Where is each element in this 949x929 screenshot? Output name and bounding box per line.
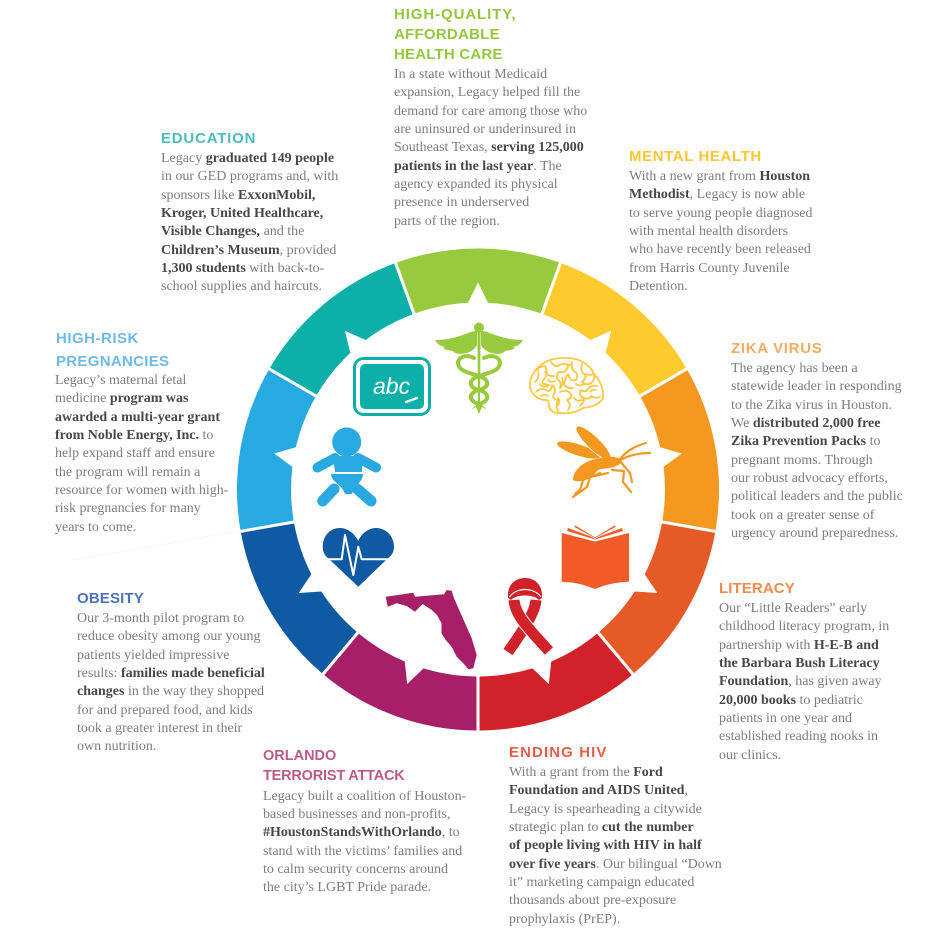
heading: ZIKA VIRUS (731, 340, 822, 357)
text block: of people living with HIV in half (509, 838, 702, 853)
heading: EDUCATION (161, 130, 256, 147)
text block: Legacy’s maternal fetal (55, 373, 186, 388)
heading: LITERACY (719, 580, 795, 597)
icon: chalkboard abc: abc (373, 373, 411, 399)
text block: With a new grant from Houston (629, 169, 810, 184)
icon: baby (318, 428, 376, 501)
text block: Visible Changes, and the (161, 224, 304, 239)
heading: ORLANDO (263, 748, 336, 764)
text block: to the Zika virus in Houston. (731, 398, 892, 413)
text block: #HoustonStandsWithOrlando, to (263, 825, 460, 840)
text block: Methodist, Legacy is now able (629, 187, 805, 202)
heading: MENTAL HEALTH (629, 148, 762, 165)
heading (394, 6, 517, 63)
text block: The agency has been a (731, 361, 858, 376)
panel: education (161, 130, 338, 294)
icon: chalkboard abc (354, 358, 430, 414)
text block: Our 3-month pilot program to (77, 611, 244, 626)
heading: OBESITY (77, 590, 144, 607)
heading: AFFORDABLE (394, 26, 500, 43)
text block: In a state without Medicaid (394, 67, 547, 82)
text block: With a grant from the Ford (509, 765, 663, 780)
text block: to calm security concerns around (263, 862, 448, 877)
icon: heart with pulse (323, 528, 394, 587)
text block: Kroger, United Healthcare, (161, 206, 323, 221)
text block: stand with the victims’ families and (263, 844, 462, 859)
text block: pregnant moms. Through (731, 453, 873, 468)
icon: open book (562, 525, 629, 589)
icon: Florida (386, 590, 477, 669)
text block: parts of the region. (394, 214, 500, 229)
heading (56, 330, 169, 370)
text block: medicine program was (55, 391, 188, 406)
text block: 1,300 students with back-to- (161, 261, 324, 276)
text block: thousands about pre-exposure (509, 893, 676, 908)
heading: PREGNANCIES (56, 352, 169, 370)
text block: took on a greater sense of (731, 508, 874, 523)
text block: Zika Prevention Packs to (731, 434, 880, 449)
icon: mosquito (555, 422, 650, 497)
text block: patients yielded impressive (77, 648, 229, 663)
text block: our clinics. (719, 748, 781, 763)
text block: the Barbara Bush Literacy (719, 656, 880, 671)
text block: risk pregnancies for many (55, 501, 201, 516)
heading: ENDING HIV (509, 744, 608, 761)
text block: patients in one year and (719, 711, 852, 726)
heading: HEALTH CARE (394, 46, 503, 63)
text block: our robust advocacy efforts, (731, 471, 888, 486)
icon: awareness ribbon (508, 578, 549, 652)
text block: 20,000 books to pediatric (719, 693, 863, 708)
heading (263, 748, 405, 784)
text block: prophylaxis (PrEP). (509, 912, 620, 927)
heading: HIGH-QUALITY, (394, 6, 517, 23)
text block: the program will remain a (55, 465, 200, 480)
text block: results: families made beneficial (77, 666, 265, 681)
text block: for and prepared food, and kids (77, 703, 253, 718)
text block: Children’s Museum, provided (161, 243, 336, 258)
panel: literacy (719, 580, 889, 763)
text block: help expand staff and ensure (55, 446, 215, 461)
text block: We distributed 2,000 free (731, 416, 880, 431)
text block: demand for care among those who (394, 104, 587, 119)
text block: Our “Little Readers” early (719, 601, 867, 616)
text block (509, 765, 722, 927)
text block: years to come. (55, 520, 136, 535)
text block: who have recently been released (629, 242, 811, 257)
text block: Legacy is spearheading a citywide (509, 802, 702, 817)
text block: partnership with H-E-B and (719, 638, 879, 653)
text block: changes in the way they shopped (77, 684, 264, 699)
text block: strategic plan to cut the number (509, 820, 694, 835)
heading: TERRORIST ATTACK (263, 768, 405, 784)
text block: the city’s LGBT Pride parade. (263, 880, 431, 895)
text block (263, 788, 466, 895)
text block: own nutrition. (77, 739, 156, 754)
text block: over five years. Our bilingual “Down (509, 857, 722, 872)
text block: urgency around preparedness. (731, 526, 898, 541)
text block: Detention. (629, 279, 688, 294)
text block: Foundation, has given away (719, 674, 882, 689)
text block: based businesses and non-profits, (263, 807, 450, 822)
text block: childhood literacy program, in (719, 619, 889, 634)
text block: to serve young people diagnosed (629, 206, 813, 221)
text block: it” marketing campaign educated (509, 875, 694, 890)
text block (731, 361, 903, 541)
text block: Foundation and AIDS United, (509, 783, 688, 798)
text block: presence in underserved (394, 195, 529, 210)
text block: with mental health disorders (629, 224, 788, 239)
text block: established reading nooks in (719, 729, 878, 744)
text block: Legacy built a coalition of Houston- (263, 788, 466, 804)
panel: high-risk pregnancies (55, 330, 228, 535)
text block: sponsors like ExxonMobil, (161, 188, 315, 203)
colour ring (227, 248, 729, 744)
text block: patients in the last year. The (394, 159, 562, 174)
text block (719, 601, 889, 763)
text block (629, 169, 813, 294)
text block: took a greater interest in their (77, 721, 242, 736)
text block (161, 151, 338, 294)
panel: mental health (629, 148, 813, 294)
text block: resource for women with high- (55, 483, 228, 498)
panel: orlando terrorist attack (263, 748, 466, 895)
text block: agency expanded its physical (394, 177, 558, 192)
text block: awarded a multi-year grant (55, 410, 220, 425)
text block (394, 67, 587, 229)
text block: political leaders and the public (731, 489, 903, 504)
text block (55, 373, 228, 535)
text block: Southeast Texas, serving 125,000 (394, 140, 584, 155)
text block: school supplies and haircuts. (161, 279, 322, 294)
text block: from Noble Energy, Inc. to (55, 428, 213, 443)
panel: ending hiv (509, 744, 722, 927)
icon: caduceus (435, 322, 523, 414)
panel: obesity (77, 590, 265, 754)
panel: high-quality health care (394, 6, 587, 229)
panel: zika virus (731, 340, 903, 541)
text block: reduce obesity among our young (77, 629, 261, 644)
icon: brain (530, 358, 603, 413)
text block: from Harris County Juvenile (629, 261, 790, 276)
text block: statewide leader in responding (731, 379, 902, 394)
text block: expansion, Legacy helped fill the (394, 85, 580, 100)
text block (77, 611, 265, 754)
heading: HIGH-RISK (56, 330, 139, 347)
text block: Legacy graduated 149 people (161, 151, 334, 166)
text block: are uninsured or underinsured in (394, 122, 576, 137)
text block: in our GED programs and, with (161, 169, 338, 184)
